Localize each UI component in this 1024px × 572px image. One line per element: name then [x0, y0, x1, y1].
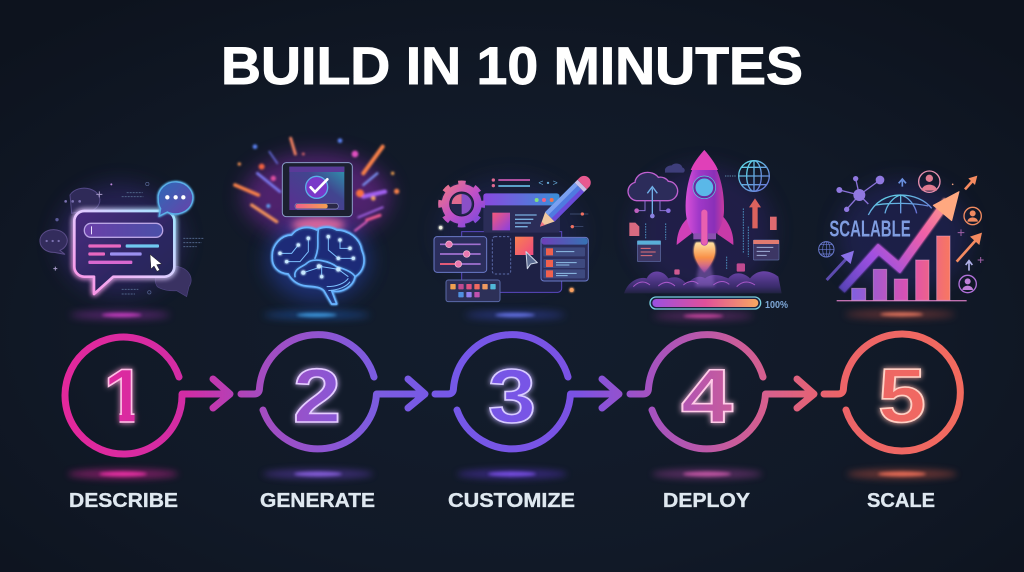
- step 3: number: 3: [488, 354, 536, 439]
- icon: editor customize: [434, 173, 594, 319]
- step 3: ring and arrow: [435, 335, 619, 449]
- step 3: label: CUSTOMIZE: [448, 490, 575, 512]
- step 5: number: 5: [878, 354, 926, 439]
- step 5: reflection: [847, 469, 957, 479]
- step 2: number: 2: [293, 354, 341, 439]
- step 4: label: DEPLOY: [663, 490, 751, 512]
- icon: brain generate: [235, 138, 399, 319]
- scalable label: SCALABLE: [829, 215, 911, 241]
- icon: rocket deploy: [624, 150, 782, 320]
- step 3: reflection: [457, 469, 567, 479]
- step 2: label: GENERATE: [260, 490, 375, 512]
- step 4: ring and arrow: [630, 335, 814, 449]
- step 1: ring and arrow: [65, 337, 230, 454]
- step 1: label: DESCRIBE: [69, 490, 178, 512]
- step 5: ring: [824, 334, 960, 451]
- step 1: reflection: [68, 469, 178, 479]
- title: BUILD IN 10 MINUTES: [221, 37, 803, 96]
- step 5: label: SCALE: [867, 490, 935, 512]
- step 2: reflection: [263, 469, 373, 479]
- icon: chat bubble describe: [40, 182, 203, 319]
- progress label: 100%: [765, 299, 789, 311]
- step 2: ring and arrow: [241, 335, 425, 449]
- icon: growth chart scale: [819, 171, 984, 318]
- step 1: number: 1: [103, 354, 146, 439]
- icon: editor customize: < • >: [538, 177, 558, 187]
- step 4: reflection: [652, 469, 762, 479]
- step 4: number: 4: [681, 354, 733, 439]
